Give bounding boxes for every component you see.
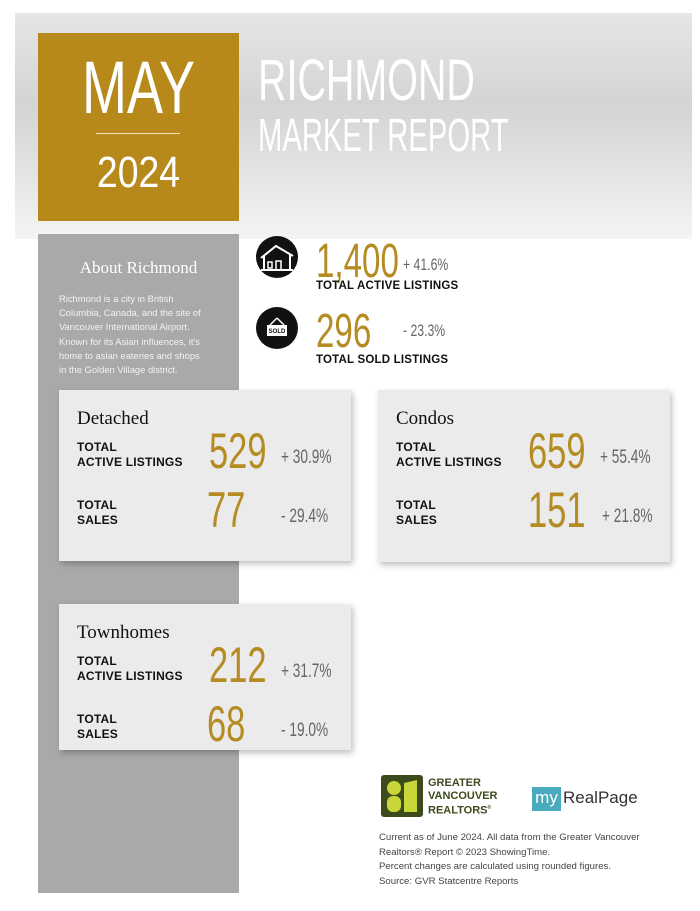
panel: condos: ACTIVE LISTINGS (396, 455, 502, 469)
panel: detached: TOTAL (77, 440, 117, 454)
title: RICHMOND (258, 48, 475, 113)
panel: detached: - 29.4% (281, 506, 328, 527)
panel: condos (378, 390, 670, 562)
panel: condos: TOTAL (396, 440, 436, 454)
stat: sold listings: 296 (316, 305, 371, 358)
panel: detached: ACTIVE LISTINGS (77, 455, 183, 469)
stat: active listings: TOTAL ACTIVE LISTINGS (316, 280, 458, 292)
panel: condos: TOTAL (396, 498, 436, 512)
footer note: Source: GVR Statcentre Reports (379, 876, 518, 886)
title (258, 48, 508, 161)
panel: townhomes: TOTAL (77, 654, 117, 668)
header background (15, 13, 692, 239)
panel: townhomes (59, 604, 351, 750)
icon: sold sign: SOLD (269, 329, 286, 335)
logo: Greater Vancouver Realtors: REALTORS® (428, 805, 491, 817)
panel: detached: 77 (207, 482, 245, 538)
panel: condos: SALES (396, 513, 437, 527)
panel: townhomes: SALES (77, 727, 118, 741)
panel: detached: SALES (77, 513, 118, 527)
panel: townhomes: Townhomes (77, 622, 170, 643)
sidebar: about Richmond (38, 234, 239, 893)
stat: active listings: + 41.6% (403, 255, 448, 274)
footer note (379, 832, 640, 886)
panel: detached: + 30.9% (281, 447, 332, 468)
title: MARKET REPORT (258, 109, 508, 161)
date box (38, 33, 239, 221)
panel: detached: TOTAL (77, 498, 117, 512)
stat: active listings (316, 235, 458, 292)
icon: house (256, 236, 298, 278)
panel: townhomes: - 19.0% (281, 720, 328, 741)
panel: condos: 151 (528, 482, 586, 538)
stat: sold listings: TOTAL SOLD LISTINGS (316, 354, 448, 366)
panel: detached: 529 (209, 423, 267, 479)
panel: condos: 659 (528, 423, 586, 479)
stat: sold listings (316, 305, 448, 366)
panel: townhomes: ACTIVE LISTINGS (77, 669, 183, 683)
logo: myRealPage: RealPage (563, 788, 638, 807)
month: MAY (82, 46, 195, 129)
sidebar heading: About Richmond (80, 258, 197, 277)
logo: myRealPage (532, 787, 638, 811)
sidebar text: Richmond is a city in British Columbia, Canada, and the site of Vancouver International Airport. Known for its Asian influences, it's home to asian eateries and shops in the Golden Village district. (59, 293, 201, 375)
panel: detached (59, 390, 351, 561)
footer note: Percent changes are calculated using rounded figures. (379, 861, 611, 872)
divider (96, 133, 180, 134)
footer note: Current as of June 2024. All data from the Greater Vancouver Realtors® Report © 2023 ShowingTime. (379, 832, 640, 858)
logo: Greater Vancouver Realtors: VANCOUVER (428, 790, 497, 802)
icon: sold sign (256, 307, 298, 349)
panel: condos: + 21.8% (602, 506, 653, 527)
panel: condos: Condos (396, 408, 454, 429)
panel: detached: Detached (77, 408, 149, 429)
panel: townhomes: TOTAL (77, 712, 117, 726)
logo: Greater Vancouver Realtors (381, 775, 498, 817)
stat: sold listings: - 23.3% (403, 321, 445, 340)
panel: condos: + 55.4% (600, 447, 651, 468)
logo: Greater Vancouver Realtors: GREATER (428, 777, 481, 789)
logo: myRealPage: my (535, 788, 558, 807)
panel: townhomes: 212 (209, 637, 267, 693)
panel: townhomes: + 31.7% (281, 661, 332, 682)
panel: townhomes: 68 (207, 696, 245, 752)
stat: active listings: 1,400 (316, 235, 399, 288)
year: 2024 (97, 148, 180, 197)
